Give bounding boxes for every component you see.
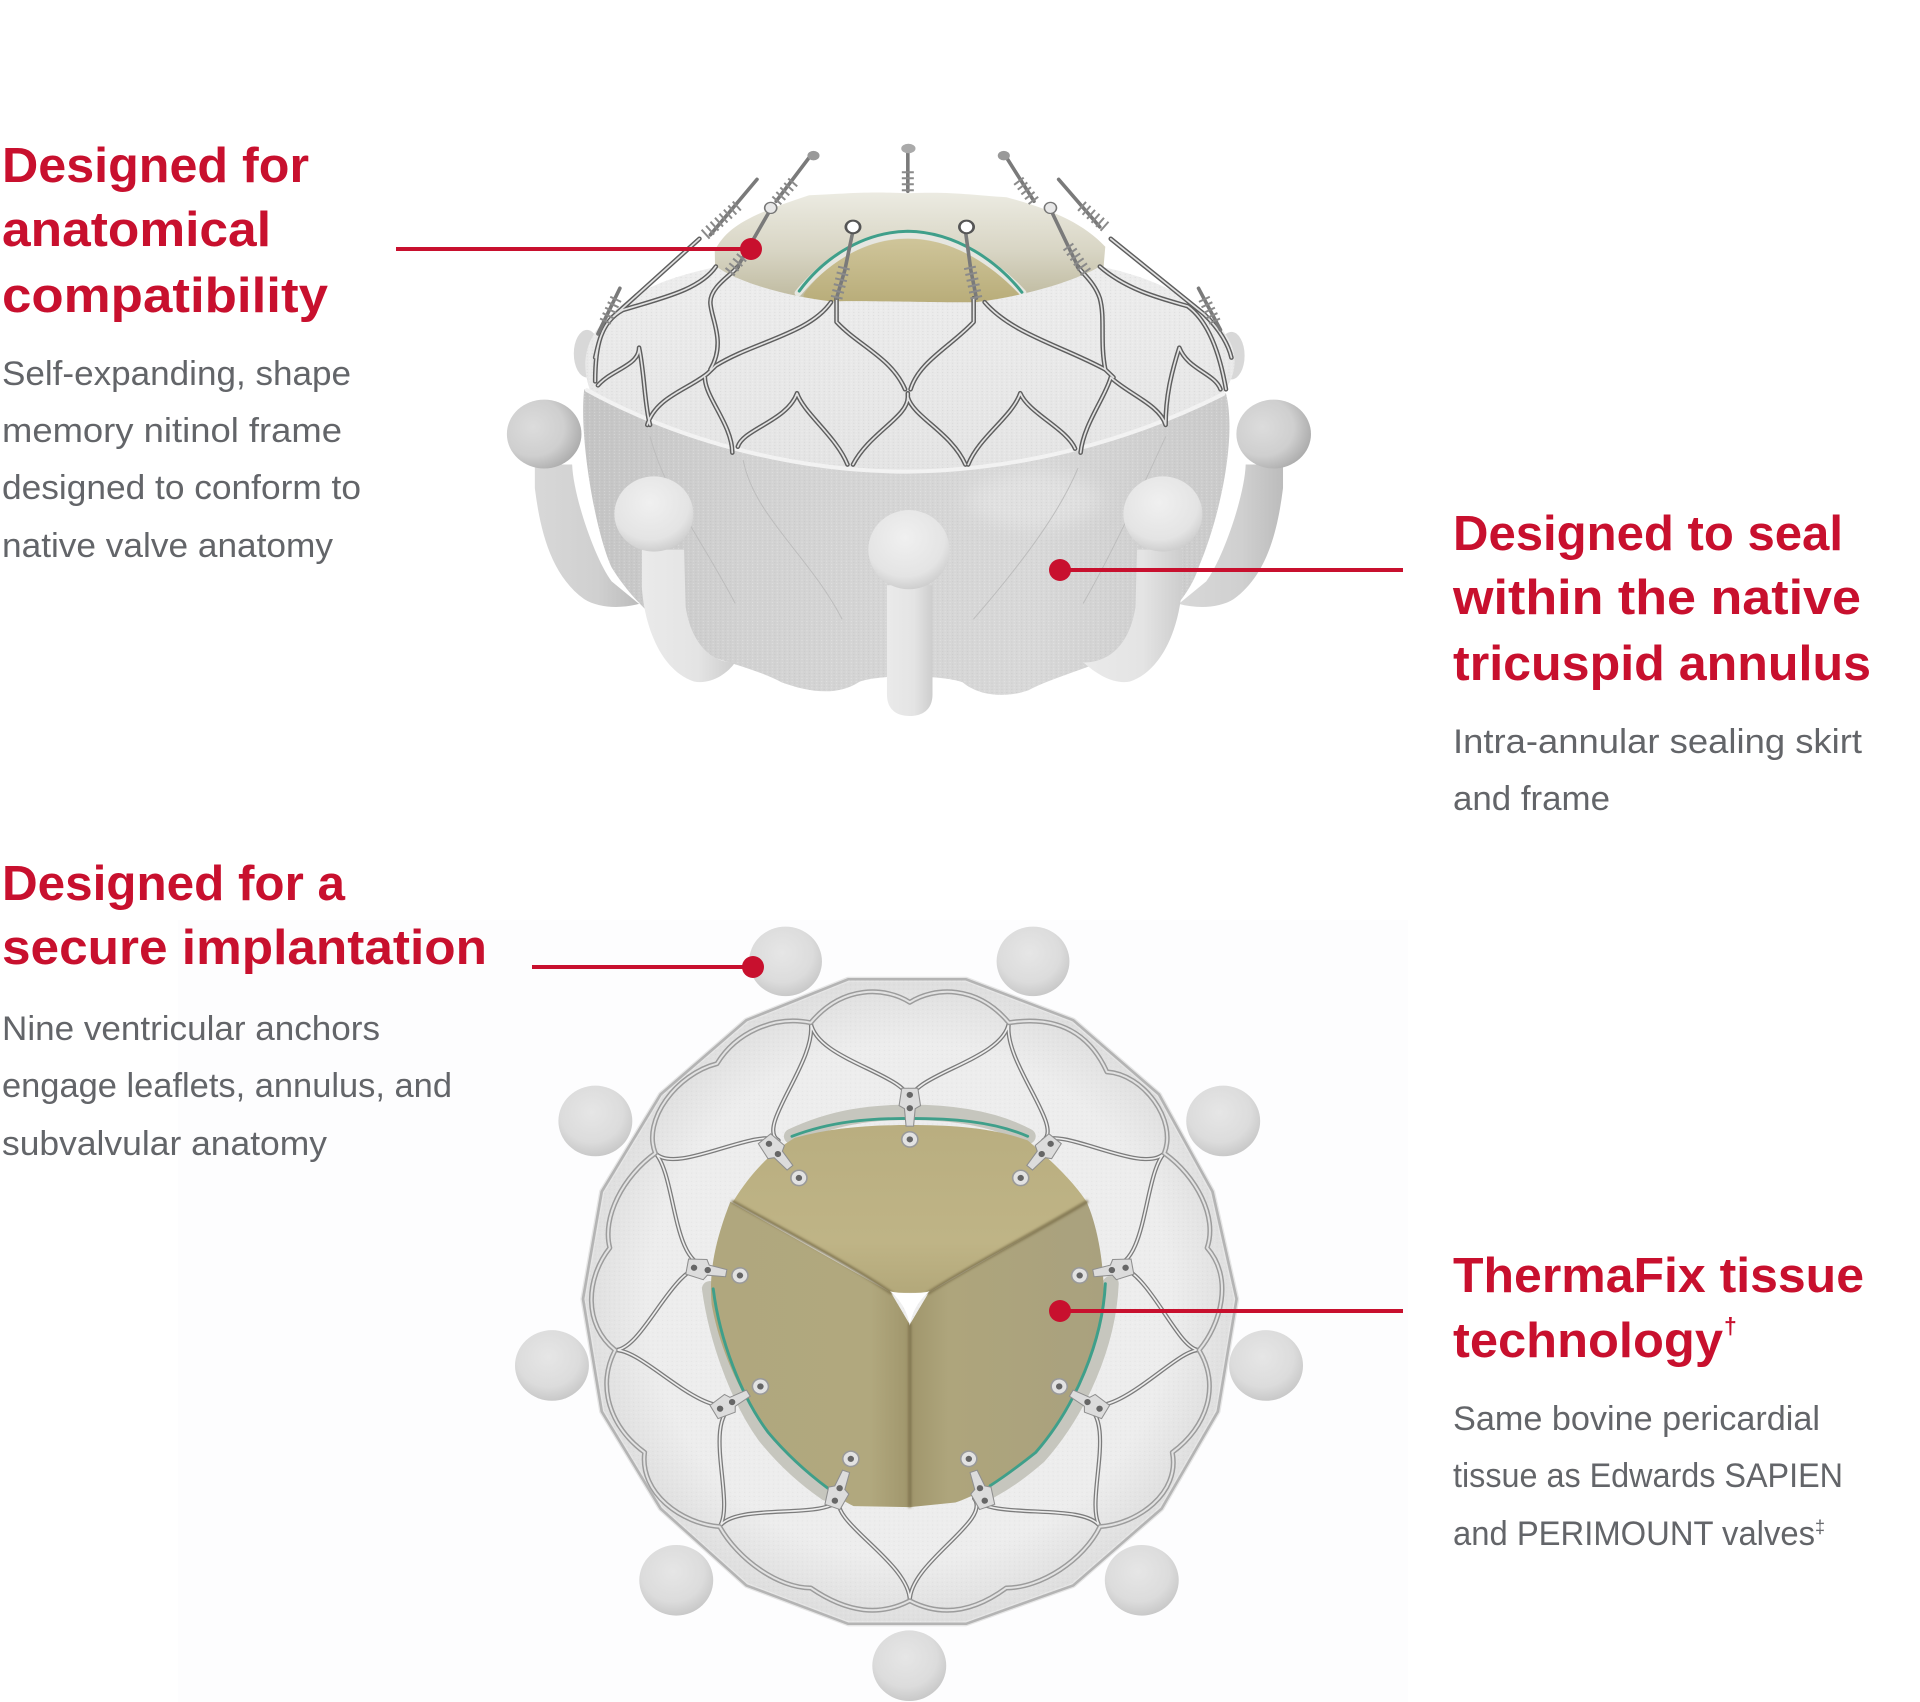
body text: and PERIMOUNT valves [1453,1515,1815,1553]
heading: Designed to seal [1453,507,1843,561]
heading [1453,1249,1864,1368]
fabric body [583,979,1237,1624]
heading: Designed for a [2,857,346,911]
heading: technology [1453,1314,1723,1368]
body text: native valve anatomy [2,527,333,565]
body text [2,355,361,565]
heading: † [1724,1313,1737,1339]
heading [1452,507,1871,691]
body text [2,1010,452,1163]
icon: side bulges behind body [574,330,1245,379]
leaflet seams [733,1202,1087,1506]
leaflet: top [733,1125,1087,1293]
leaflet: lower left [711,1202,910,1507]
lower fabric skirt [583,389,1229,695]
body text: subvalvular anatomy [2,1125,327,1163]
commissure hooks [598,144,1220,334]
heading: tricuspid annulus [1453,637,1871,691]
body text: Self-expanding, shape [2,355,351,393]
heading [2,857,487,975]
callout: ThermaFix tissue [1453,1249,1864,1553]
illustration: valve top view [515,927,1303,1701]
commissure attachments [685,1088,1134,1510]
green sewing ring [798,231,1023,293]
body text: Same bovine pericardial [1453,1400,1820,1438]
heading: ThermaFix tissue [1453,1249,1864,1303]
fabric texture [583,979,1237,1624]
nitinol frame [595,239,1231,465]
body text: Nine ventricular anchors [2,1010,380,1048]
leaflet opening shadow band [710,1112,1111,1493]
body text: designed to conform to [2,469,361,507]
skirt top rim [587,390,1223,472]
back wall of valve [715,192,1105,310]
green sewing ring [713,1118,1105,1488]
callout: seal [1452,507,1871,818]
callout: anatomical compatibility [2,139,361,565]
leaflet tissue dome [804,239,1020,310]
illustration: valve side view [507,144,1311,716]
lower photo background tint [178,920,1408,1702]
body text: tissue as Edwards SAPIEN [1453,1457,1843,1495]
body text: ‡ [1815,1517,1825,1537]
heading: Designed for [2,139,309,193]
heading: compatibility [2,269,328,323]
central orifice [890,1291,930,1326]
ThermaFix leaflets [711,1125,1104,1507]
upper fabric cuff [585,267,1235,470]
body text: and frame [1453,780,1610,818]
body text [1453,1400,1843,1553]
body text: Intra-annular sealing skirt [1453,723,1863,761]
heading: secure implantation [2,921,487,975]
leader: anatomical compatibility [396,238,762,260]
body text: engage leaflets, annulus, and [2,1067,452,1105]
leader: ThermaFix [1049,1300,1403,1322]
leader: secure implantation [532,956,764,978]
heading: within the native [1452,571,1861,625]
leaflet: lower right [910,1202,1104,1507]
body text: memory nitinol frame [2,412,342,450]
ventricular anchor balls [515,927,1303,1701]
body text [1453,723,1863,818]
back anchors [507,400,1311,607]
heading: anatomical [2,203,271,257]
front anchors [614,476,1202,716]
nitinol frame [583,979,1237,1624]
callout: secure implantation [2,857,487,1163]
heading [2,139,328,323]
leader: seal [1049,559,1403,581]
